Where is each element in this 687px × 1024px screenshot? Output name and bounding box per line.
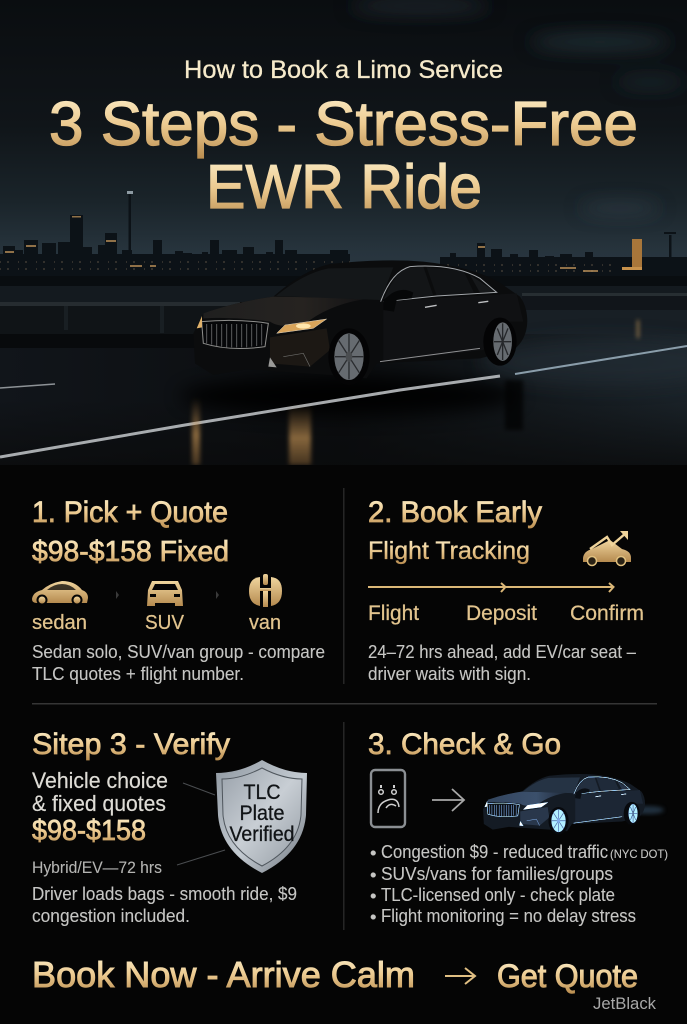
bullet list: • (370, 885, 376, 906)
skyline (0, 191, 687, 278)
subheading: Flight Tracking (368, 537, 530, 565)
description (32, 883, 297, 926)
bullet list: (NYC DOT) (610, 847, 668, 861)
brand: JetBlack (593, 994, 656, 1013)
timeline arrow (368, 583, 614, 592)
panel: step 2 book early (368, 496, 644, 684)
headlight reflections (192, 320, 639, 465)
vehicle labels (32, 612, 281, 634)
price: $98-$158 Fixed (32, 536, 229, 568)
bullet list: Flight monitoring = no delay stress (381, 905, 636, 926)
timeline labels: Deposit (466, 602, 537, 625)
bullet list: • (370, 906, 376, 927)
lane markings (0, 346, 687, 457)
call to action (32, 954, 638, 995)
dividers (32, 488, 657, 930)
panel: step 3 verify (32, 728, 307, 926)
icon: phone with driver (371, 770, 405, 827)
heading: 2. Book Early (368, 496, 542, 529)
arrow (445, 968, 475, 984)
icon: van (249, 574, 282, 607)
TLC shield badge (216, 760, 307, 873)
heading: 3. Check & Go (368, 728, 561, 761)
bullet list: Congestion $9 - reduced traffic (381, 841, 608, 862)
panel: step 1 pick and quote (32, 496, 325, 684)
lower black panel (0, 465, 687, 1024)
bullet list: SUVs/vans for families/groups (381, 863, 613, 884)
vehicle choice text: Vehicle choice (32, 768, 168, 793)
main title line 2: EWR Ride (206, 153, 482, 222)
bullet list: • (370, 842, 376, 863)
TLC shield badge: TLC (244, 781, 280, 804)
price: $98-$158 (32, 815, 146, 847)
description: congestion included. (32, 905, 190, 926)
icon: sedan (32, 581, 88, 606)
vehicle labels: SUV (145, 612, 185, 634)
arrow (432, 789, 464, 811)
vehicle choice text (32, 768, 168, 816)
TLC shield badge: Verified (230, 823, 294, 846)
description: TLC quotes + flight number. (32, 663, 244, 684)
bullet list (370, 841, 668, 927)
icon: chevron (116, 591, 119, 599)
timeline labels: Confirm (570, 602, 644, 625)
description: 24–72 hrs ahead, add EV/car seat – (368, 641, 637, 662)
guard rail (0, 293, 687, 334)
hero limo car (193, 260, 527, 385)
bullet list: • (370, 864, 376, 885)
TLC shield badge: Plate (240, 802, 284, 825)
icon: chevron (216, 591, 219, 599)
limo car small (483, 774, 664, 834)
heading: Sitep 3 - Verify (32, 728, 230, 761)
description: Sedan solo, SUV/van group - compare (32, 641, 325, 662)
bullet list: TLC-licensed only - check plate (381, 884, 615, 905)
call to action: Book Now - Arrive Calm (32, 954, 415, 995)
main title line 1: 3 Steps - Stress-Free (49, 90, 638, 159)
title kicker: How to Book a Limo Service (184, 56, 503, 84)
description (32, 641, 325, 684)
get quote: Get Quote (497, 958, 638, 994)
icon: car with rising arrow (583, 531, 631, 566)
description: Driver loads bags - smooth ride, $9 (32, 883, 297, 904)
timeline labels (368, 602, 644, 625)
leader lines (177, 783, 225, 865)
description (368, 641, 637, 684)
vehicle labels: van (249, 612, 281, 634)
hybrid note: Hybrid/EV—72 hrs (32, 858, 162, 877)
timeline labels: Flight (368, 602, 419, 625)
icon: SUV (147, 581, 183, 606)
vehicle choice text: & fixed quotes (32, 791, 166, 816)
vehicle labels: sedan (32, 612, 87, 634)
heading: 1. Pick + Quote (32, 496, 228, 529)
hero scene background (0, 0, 687, 465)
description: driver waits with sign. (368, 663, 531, 684)
panel: check and go (368, 728, 668, 927)
